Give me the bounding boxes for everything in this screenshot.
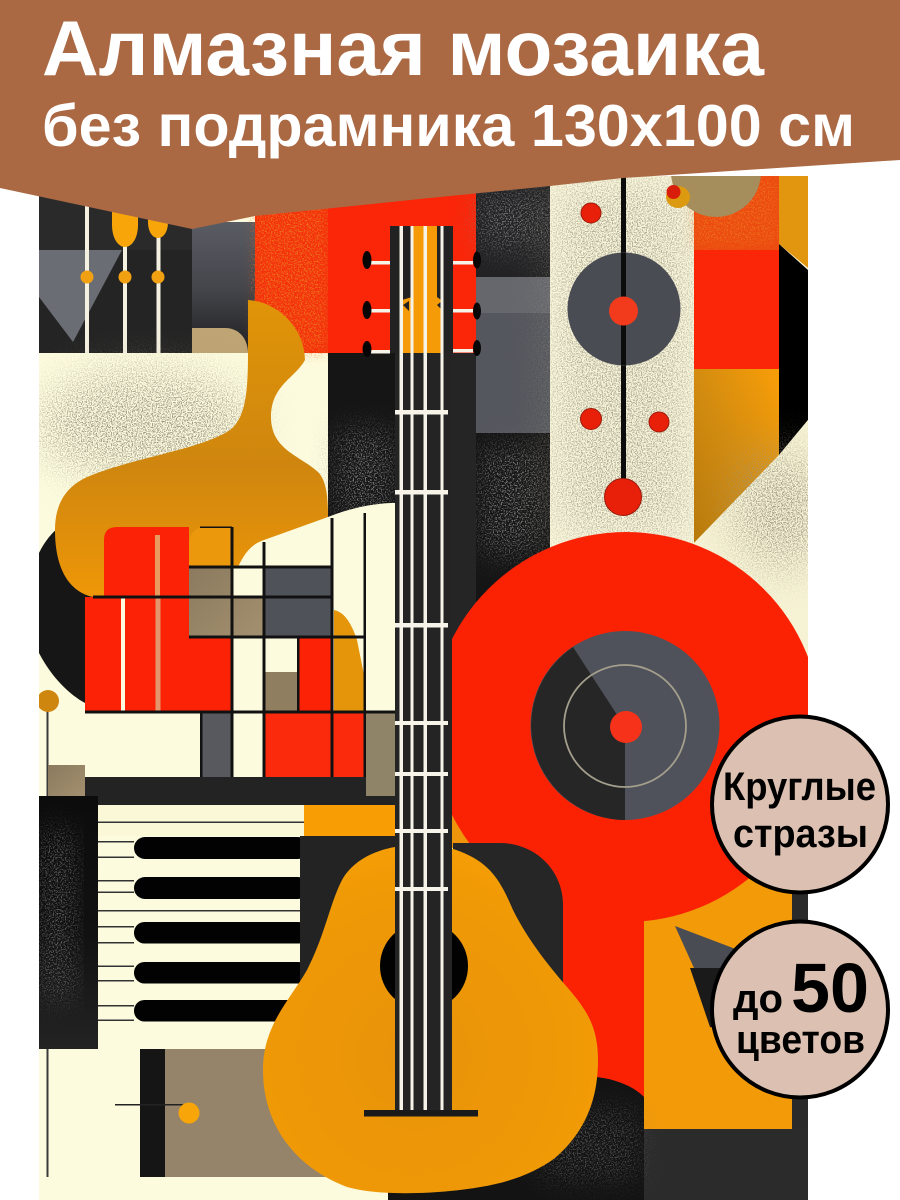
tan rounded shape [192, 328, 248, 353]
icon: tuning pegs [362, 251, 481, 357]
banner: brown title ribbon [0, 0, 900, 229]
badge: round rhinestones [712, 716, 888, 892]
badge: up to 50 colors: цветов [736, 1018, 865, 1062]
panel: guitar neck [364, 226, 478, 1116]
panel: black grainy block behind neck [315, 353, 395, 517]
panel: gray gradient block [192, 222, 255, 353]
guitar bridge [364, 1110, 478, 1116]
panel: bottom right dark area [388, 1077, 808, 1200]
panel: black circle left [39, 530, 93, 703]
icon: gray record disc [568, 252, 680, 366]
panel: dark keyboard backing [39, 777, 395, 1049]
panel: big red record [431, 532, 821, 1100]
panel: gold block with triangle [644, 878, 808, 1129]
shape: gold grand-piano blob [55, 300, 328, 600]
poster artwork: abstract music composition [35, 127, 830, 1200]
panel: cream piano-lid area [238, 503, 395, 613]
panel: bottom tan block with dot [115, 1049, 345, 1177]
dark strip beside neck [452, 353, 476, 653]
panel: red headstock block [328, 185, 476, 353]
small tan box [48, 765, 85, 797]
panel: orange-red grainy block [255, 205, 328, 353]
title: second line: без подрамника 130х100 см [42, 93, 855, 159]
icon: red dots [580, 203, 669, 516]
icon: vinyl record center [530, 631, 720, 820]
panel: cream column with circles [550, 176, 694, 546]
title: first line: Алмазная мозаика [42, 4, 765, 92]
panel: gray column [476, 185, 550, 613]
icon: gold pin with long stem [37, 690, 59, 1177]
shape: guitar body [263, 847, 598, 1193]
panel: right color column [666, 176, 808, 656]
panel: piano keyboard [98, 805, 395, 1049]
icon: sound hole [380, 932, 468, 1000]
panel: top-left dark instrument block [39, 190, 192, 353]
badge: up to 50 colors: до [733, 977, 783, 1021]
badge: up to 50 colors: 50 [791, 949, 869, 1027]
badge: round rhinestones: стразы [733, 812, 868, 856]
badge: round rhinestones: Круглые [723, 765, 876, 809]
badge: up to 50 colors [712, 922, 888, 1098]
shape: dark rounded block behind guitar [453, 843, 563, 990]
panel: mondrian color grid [85, 513, 395, 805]
panel: cream grainy area [35, 370, 255, 480]
